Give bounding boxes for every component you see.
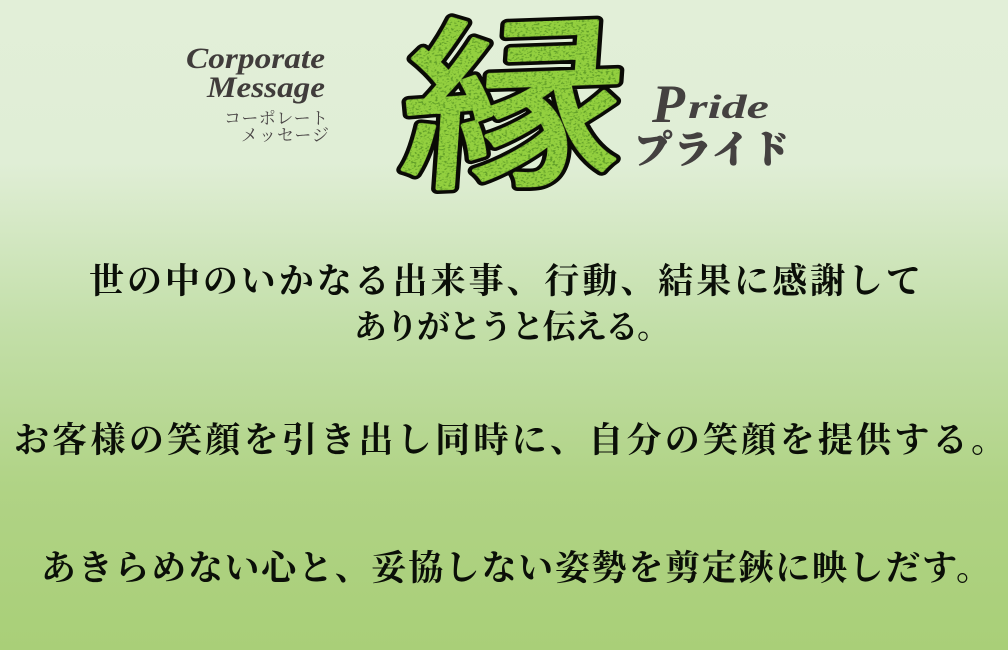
message line 3: お客様の笑顔を引き出し同時に、自分の笑顔を提供する。 [14, 421, 1006, 460]
message line 1: 世の中のいかなる出来事、行動、結果に感謝して [89, 262, 921, 301]
heading: Pride: P [651, 74, 686, 134]
message line 4: あきらめない心と、妥協しない姿勢を剪定鋏に映しだす。 [41, 549, 991, 588]
heading: Corporate Message: Message [206, 71, 325, 104]
heading: Corporate Message [186, 42, 329, 146]
message line 2: ありがとうと伝える。 [354, 309, 670, 346]
heading: Pride: プライド [634, 119, 790, 174]
heading: Corporate Message: コーポレート [224, 104, 328, 129]
heading: Corporate Message: Corporate [186, 42, 325, 75]
heading: Pride [634, 74, 790, 174]
heading: Corporate Message: メッセージ [241, 121, 329, 146]
heading: Pride: ride [688, 89, 769, 126]
